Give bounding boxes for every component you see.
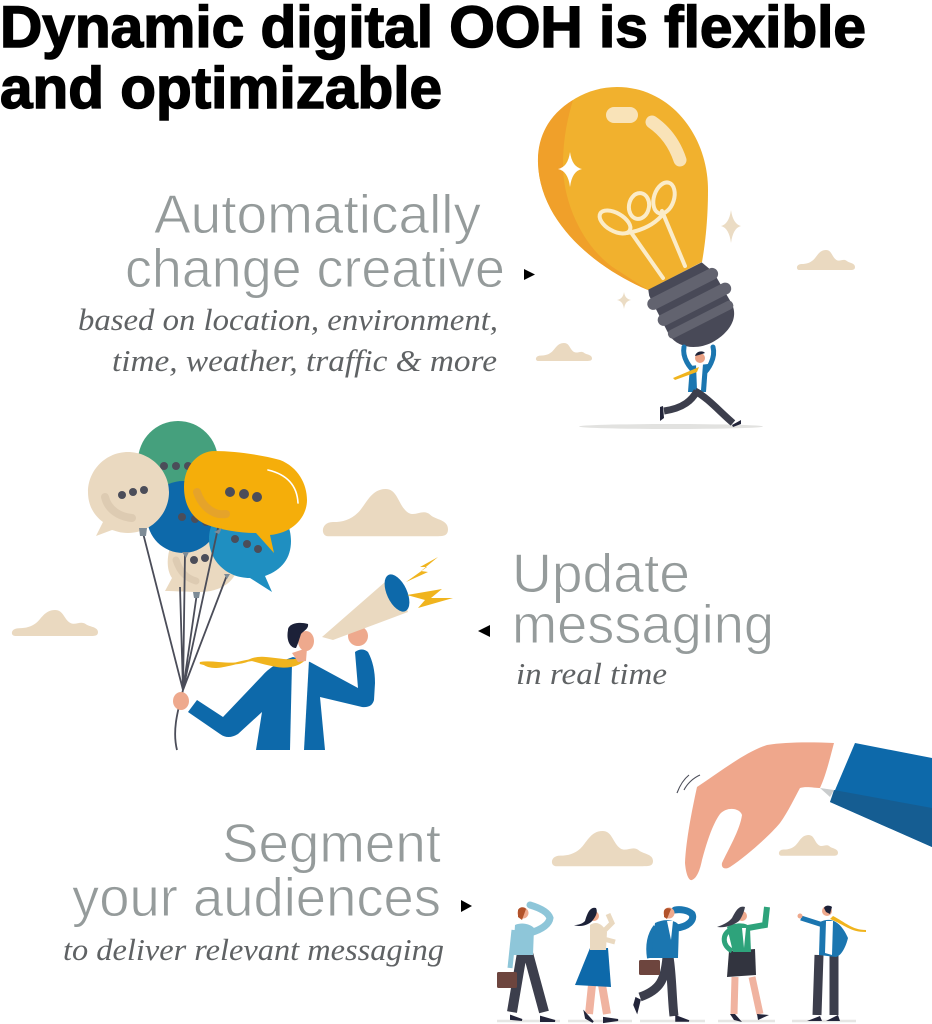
balloon: beige	[88, 452, 169, 536]
text block: automatically change creative: based on location, environment,	[78, 302, 498, 337]
title	[0, 0, 866, 121]
person 3	[634, 908, 693, 1021]
cloud	[536, 343, 592, 361]
person 1	[497, 905, 555, 1021]
cloud	[779, 835, 838, 856]
cloud	[12, 610, 98, 636]
balloon: light blue	[209, 500, 291, 592]
cloud	[797, 250, 855, 270]
person 2	[574, 908, 618, 1022]
text block: automatically change creative	[78, 183, 505, 378]
text block: segment your audiences: your audiences	[72, 866, 441, 928]
text block: automatically change creative: Automatically	[154, 183, 481, 245]
person 5	[798, 906, 866, 1021]
balloon: green	[138, 421, 218, 501]
balloon knots	[139, 528, 230, 598]
illustration: man with megaphone	[173, 557, 453, 750]
text block: update messaging	[512, 542, 774, 691]
person 4	[717, 907, 769, 1022]
arrow: to audience	[461, 900, 472, 912]
balloon strings	[143, 528, 227, 750]
cloud	[323, 489, 448, 536]
arrow: to megaphone	[478, 625, 490, 637]
text block: segment your audiences: Segment	[222, 812, 441, 874]
text block: automatically change creative: time, weather, traffic & more	[112, 343, 497, 378]
balloon: dark blue	[147, 481, 219, 553]
balloon: yellow	[184, 451, 307, 553]
ground shadows	[497, 1020, 856, 1022]
illustration: audience of five people	[497, 905, 866, 1022]
cloud	[552, 831, 653, 866]
text block: segment your audiences	[63, 812, 444, 967]
text block: update messaging: messaging	[512, 593, 774, 655]
text block: update messaging: in real time	[516, 656, 667, 691]
balloon: back beige	[165, 520, 238, 592]
text block: segment your audiences: to deliver relevant messaging	[63, 932, 444, 967]
figure: running businessman	[579, 347, 763, 429]
title: and optimizable	[0, 56, 442, 121]
text block: automatically change creative: change creative	[125, 237, 505, 299]
arrow: to light bulb	[524, 269, 535, 280]
illustration: light bulb carried by man	[538, 87, 763, 429]
illustration: speech bubble balloons	[88, 421, 307, 750]
illustration: giant hand	[677, 742, 932, 880]
text block: update messaging: Update	[512, 542, 690, 604]
